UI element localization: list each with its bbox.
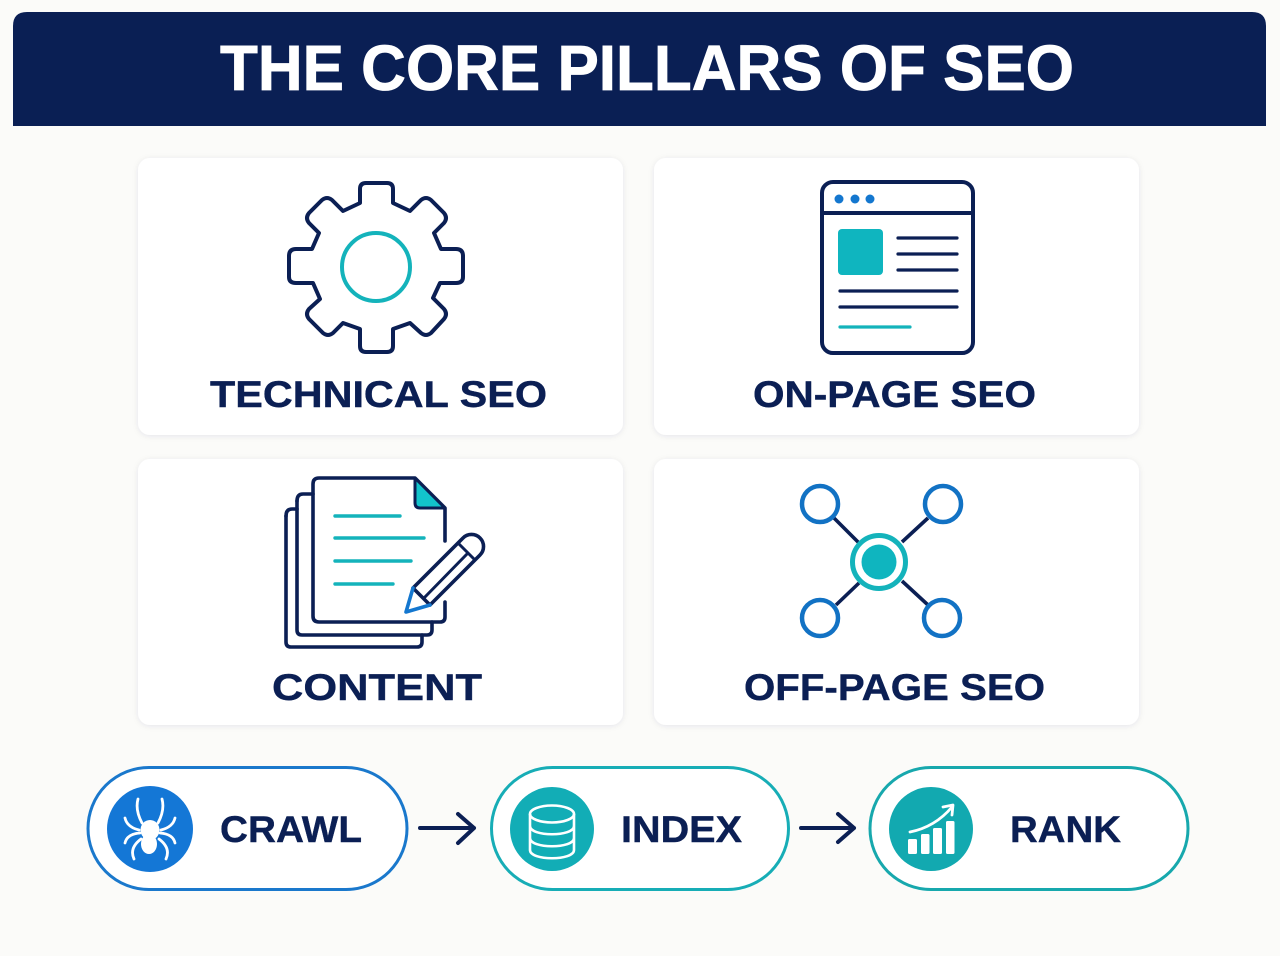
label: content: CONTENT	[272, 667, 482, 708]
panel: technical SEO	[138, 158, 623, 435]
step: index	[492, 768, 788, 890]
icon: gear	[289, 183, 463, 352]
step: rank	[870, 768, 1188, 890]
arrow: index to rank	[801, 814, 854, 842]
label: rank: RANK	[1010, 809, 1121, 850]
icon: rising chart	[889, 787, 973, 871]
label: off-page SEO: OFF-PAGE SEO	[744, 667, 1045, 708]
label: technical SEO: TECHNICAL SEO	[210, 374, 547, 415]
icon: database	[510, 787, 594, 871]
icon: link network	[802, 486, 961, 636]
panel: on-page SEO	[654, 158, 1139, 435]
title: THE CORE PILLARS OF SEO	[220, 32, 1074, 104]
label: on-page SEO: ON-PAGE SEO	[753, 374, 1036, 415]
step: crawl	[88, 768, 407, 890]
icon: documents and pencil	[286, 478, 484, 647]
icon: web page	[822, 182, 973, 353]
panel: off-page SEO	[654, 459, 1139, 725]
icon: spider	[107, 786, 193, 872]
title banner	[13, 12, 1266, 126]
panel: content	[138, 459, 623, 725]
label: crawl: CRAWL	[220, 809, 362, 850]
arrow: crawl to index	[420, 814, 474, 843]
label: index: INDEX	[621, 809, 742, 850]
